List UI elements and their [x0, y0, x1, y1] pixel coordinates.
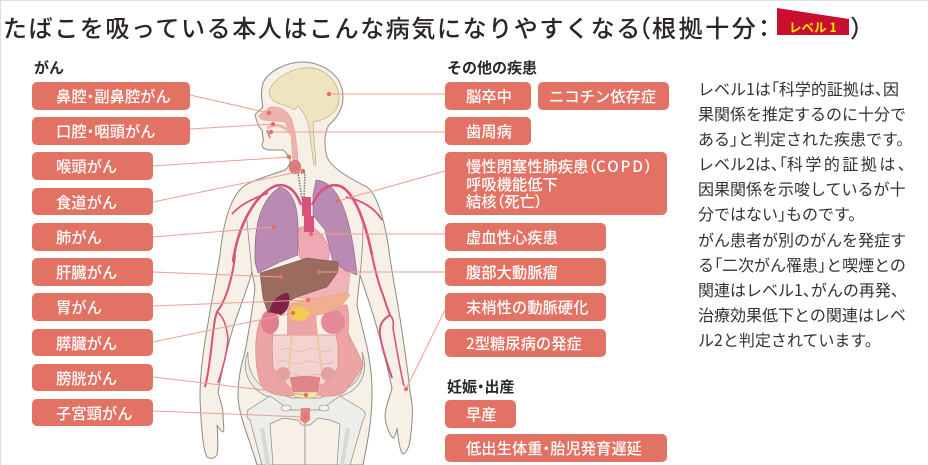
leader lines — [153, 94, 445, 417]
other disease labels: 虚血性心疾患 — [466, 226, 558, 248]
other disease labels: 2型糖尿病の発症 — [466, 332, 582, 354]
lungs — [255, 187, 298, 273]
heading: pregnancy and childbirth: 妊娠・出産 — [447, 376, 515, 397]
title: たばこを吸っている本人はこんな病気になりやすくなる — [3, 9, 642, 44]
title: （ — [627, 9, 653, 44]
small intestine — [272, 335, 338, 388]
explanatory text: ある」と判定された疾患です。 — [698, 126, 912, 150]
pregnancy labels — [445, 400, 667, 462]
badge: level 1 — [777, 8, 849, 36]
larynx — [289, 160, 301, 174]
main arteries — [205, 185, 404, 387]
brain — [269, 68, 339, 165]
badge: level 1: レベル 1 — [789, 17, 837, 36]
explanatory text: ル2と判定されています。 — [698, 327, 881, 351]
cancer labels: 胃がん — [56, 296, 102, 318]
leader dots — [267, 92, 408, 419]
explanatory text: 関連はレベル1、がんの再発、 — [698, 277, 899, 301]
liver — [260, 258, 338, 313]
uterus and bladder — [290, 376, 320, 392]
pancreas — [290, 293, 350, 318]
cancer labels: 膀胱がん — [56, 366, 117, 388]
title: 根拠十分 — [652, 9, 758, 44]
explanatory text: 果関係を推定するのに十分で — [698, 101, 906, 125]
pelvis — [245, 352, 365, 412]
cancer labels: 鼻腔・副鼻腔がん — [56, 85, 171, 107]
other disease labels: 腹部大動脈瘤 — [466, 261, 558, 283]
pregnancy labels: 早産 — [466, 403, 497, 425]
stomach — [290, 258, 350, 300]
explanatory text: がん患者が別のがんを発症す — [698, 227, 906, 251]
explanatory text: レベル1は「科学的証拠は、因 — [698, 76, 899, 100]
colon — [256, 305, 363, 396]
title closing bracket: ） — [850, 9, 874, 44]
title: ： — [752, 9, 778, 44]
explanatory text: 治療効果低下との関連はレベ — [698, 302, 906, 326]
other disease labels: 結核（死亡） — [466, 190, 543, 212]
explanatory text: 分ではない」ものです。 — [698, 201, 864, 225]
heart — [298, 226, 329, 264]
cancer labels: 喉頭がん — [56, 155, 117, 177]
other disease labels: 呼吸機能低下 — [466, 173, 558, 195]
nasal and oral cavity — [258, 107, 298, 165]
cancer labels: 膵臓がん — [56, 332, 117, 354]
other disease labels: 末梢性の動脈硬化 — [466, 296, 588, 318]
body silhouette — [200, 62, 412, 465]
cancer labels: 食道がん — [56, 190, 117, 212]
cancer labels: 口腔・咽頭がん — [56, 120, 155, 142]
explanatory text: レベル2は、「科学的証拠は、 — [698, 151, 906, 175]
explanatory text: る「二次がん罹患」と喫煙との — [698, 252, 906, 276]
other disease labels — [445, 82, 669, 357]
heading: cancer: がん — [34, 57, 64, 78]
pregnancy labels: 低出生体重・胎児発育遅延 — [466, 437, 642, 459]
other disease labels: 脳卒中 — [466, 85, 512, 107]
other disease labels: 歯周病 — [466, 120, 512, 142]
explanatory text — [698, 76, 912, 351]
cancer labels: 肺がん — [56, 226, 102, 248]
cancer labels — [32, 82, 190, 426]
other disease labels: ニコチン依存症 — [549, 85, 656, 107]
cancer labels: 子宮頸がん — [56, 402, 132, 424]
heading: other diseases: その他の疾患 — [447, 57, 537, 78]
other disease labels: 慢性閉塞性肺疾患（COPD） — [466, 155, 652, 177]
explanatory text: 因果関係を示唆しているが十 — [698, 176, 906, 200]
cancer labels: 肝臓がん — [56, 261, 117, 283]
trachea — [298, 173, 305, 200]
upper abdominal pouches — [261, 310, 279, 334]
